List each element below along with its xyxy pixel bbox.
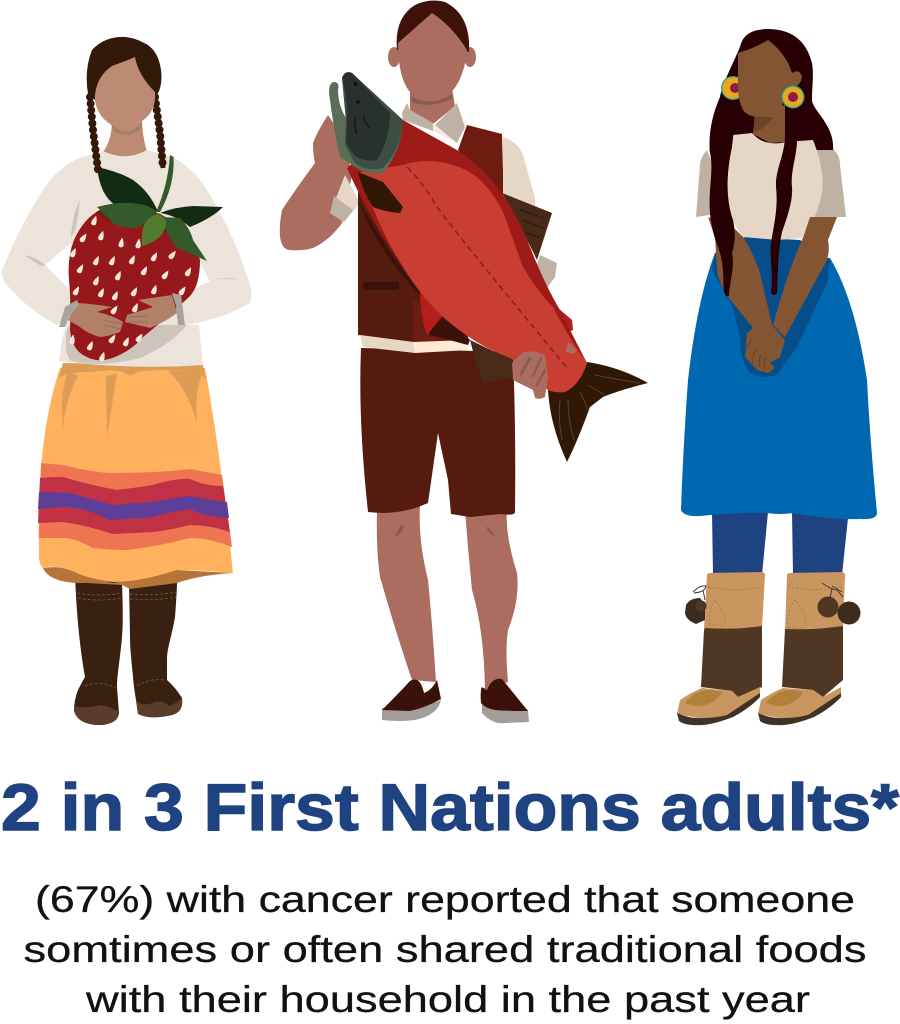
woman 3 neck xyxy=(753,105,785,143)
man left sleeve xyxy=(330,175,360,222)
man hand on salmon xyxy=(512,342,577,399)
salmon xyxy=(329,72,648,462)
body text: somtimes or often shared traditional foods xyxy=(24,929,866,970)
woman 3 boots xyxy=(677,572,845,725)
icon: pom poms xyxy=(685,583,860,624)
man legs xyxy=(377,505,518,690)
woman 1 hands and cuffs xyxy=(59,293,185,337)
woman 3 hair strands xyxy=(709,105,797,296)
man right sleeve xyxy=(503,137,557,288)
woman 1 hair and braids xyxy=(87,37,163,170)
woman 1 sweater xyxy=(2,150,252,367)
salmon red fin xyxy=(420,290,573,335)
woman 1 skirt xyxy=(38,363,233,589)
woman 3 back hair xyxy=(709,29,833,160)
salmon tail xyxy=(548,362,648,462)
body text: with their household in the past year xyxy=(85,979,810,1020)
body text: (67%) with cancer reported that someone xyxy=(35,879,855,920)
man shirt band xyxy=(360,335,469,353)
skirt stripe: purple xyxy=(38,492,229,520)
woman 3 arms xyxy=(708,217,837,337)
illustration: man holding salmon xyxy=(280,1,648,723)
title: 2 in 3 First Nations adults* xyxy=(1,770,899,844)
woman 3 earrings xyxy=(721,40,804,132)
woman 1 neck and face xyxy=(103,118,147,158)
woman 3 skirt xyxy=(681,237,877,519)
salmon back fin xyxy=(502,193,552,260)
salmon body xyxy=(347,120,587,392)
man neck and head xyxy=(388,1,476,124)
skirt stripe: coral xyxy=(39,463,232,550)
woman 3 sleeves xyxy=(696,138,846,217)
salmon head xyxy=(329,73,403,174)
man shorts xyxy=(360,348,515,517)
salmon belly fin xyxy=(470,340,512,383)
icon: strawberry xyxy=(69,155,223,362)
woman 3 leggings xyxy=(712,512,848,575)
illustration: woman holding strawberry xyxy=(2,37,252,725)
woman 3 hands xyxy=(745,325,785,373)
salmon pectoral fin xyxy=(358,172,403,213)
strawberry leaves xyxy=(97,155,223,261)
man collar xyxy=(402,103,465,143)
man arm xyxy=(280,115,352,250)
skirt stripe: crimson xyxy=(38,477,230,534)
woman 1 boots xyxy=(74,570,182,725)
woman 3 blouse xyxy=(728,133,823,240)
man vest xyxy=(358,125,504,342)
body text xyxy=(24,879,866,1020)
salmon shadow xyxy=(358,200,470,345)
man shoes xyxy=(382,679,529,723)
illustration: woman in blue skirt xyxy=(677,29,877,725)
salmon lateral line xyxy=(407,167,567,368)
